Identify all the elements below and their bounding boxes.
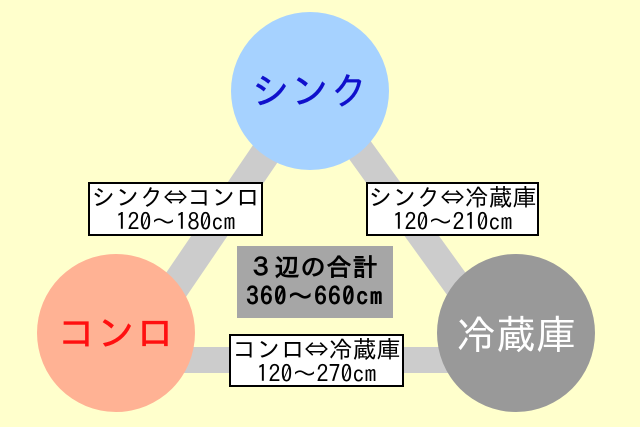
total callout: ３辺の合計 — [248, 255, 378, 280]
circle: stove: コンロ — [58, 313, 174, 352]
circle: sink: シンク — [252, 71, 368, 110]
label: sink to stove: 120～180cm — [116, 209, 236, 233]
label: sink to fridge — [366, 182, 539, 236]
circle: fridge — [437, 254, 595, 412]
label: sink to stove: シンク⇔コンロ — [92, 185, 260, 209]
circle: fridge: 冷蔵庫 — [456, 314, 576, 354]
total callout — [237, 246, 393, 318]
label: sink to fridge: 120～210cm — [392, 209, 512, 233]
circle: stove — [37, 254, 195, 412]
label: sink to fridge: シンク⇔冷蔵庫 — [368, 185, 536, 209]
label: stove to fridge: コンロ⇔冷蔵庫 — [232, 337, 400, 361]
label: stove to fridge — [229, 334, 404, 387]
label: sink to stove — [88, 182, 263, 236]
circle: sink — [231, 12, 389, 170]
label: stove to fridge: 120～270cm — [256, 361, 376, 385]
total callout: 360～660cm — [246, 284, 384, 309]
